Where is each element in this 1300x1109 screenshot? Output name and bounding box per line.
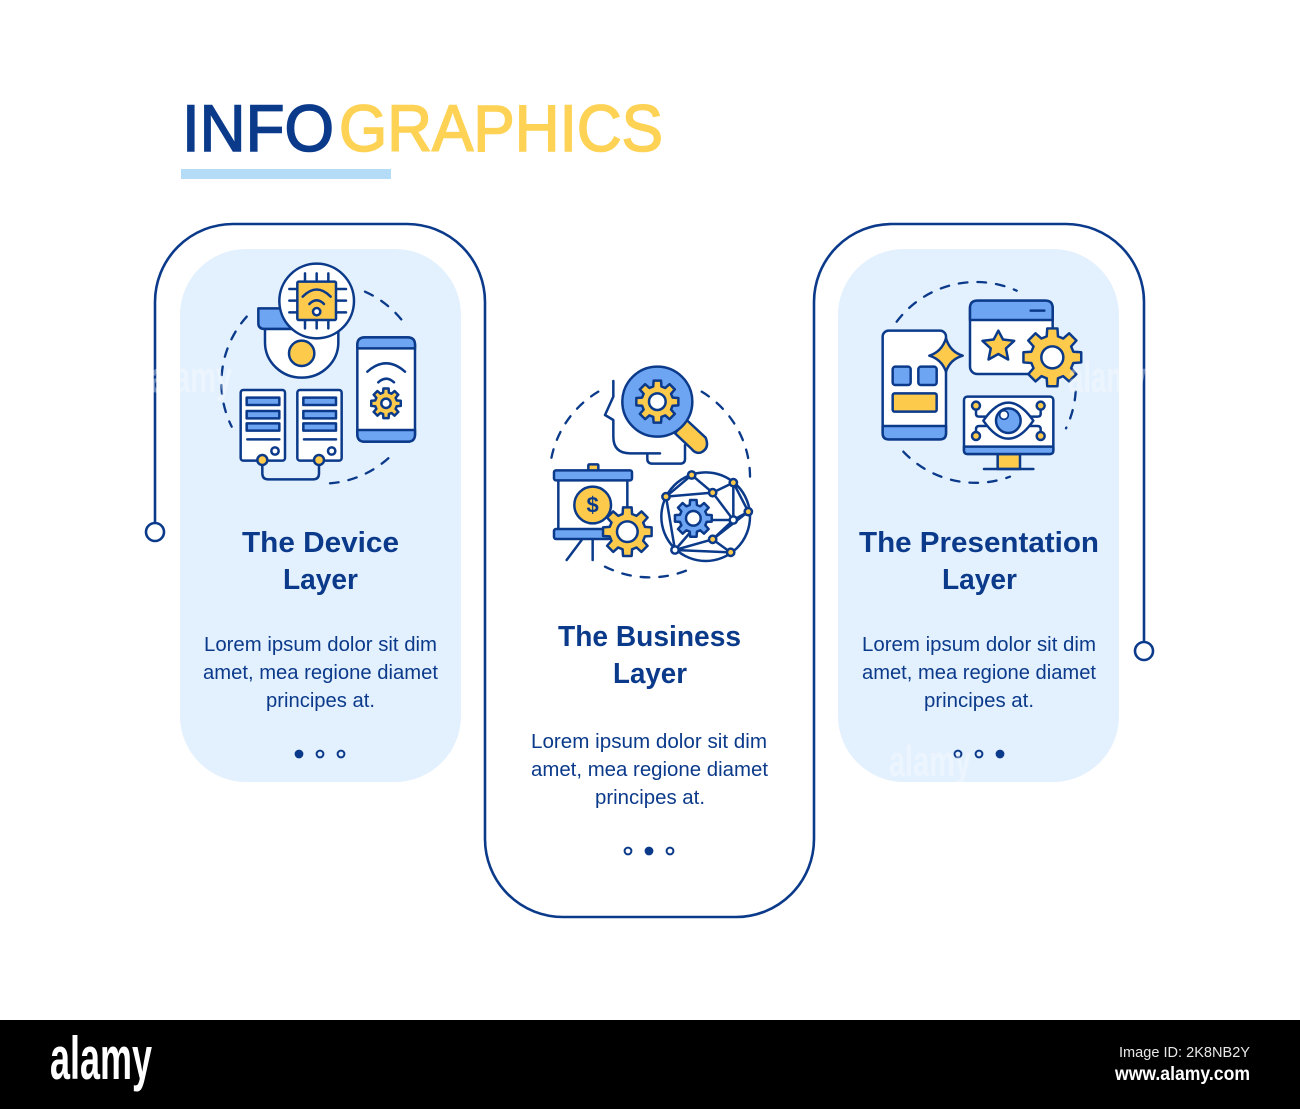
text: device layer description: Lorem ipsum dolor sit dim xyxy=(204,634,437,656)
pagination dots: business layer xyxy=(625,848,673,854)
phone xyxy=(357,337,415,442)
text: business layer description: Lorem ipsum dolor sit dim xyxy=(531,731,767,753)
heading: The Business Layer: Layer xyxy=(613,658,687,690)
heading: The Presentation Layer xyxy=(859,527,1099,596)
presentation board: $ xyxy=(587,493,599,518)
text: business layer description: principes at. xyxy=(595,787,705,809)
icon: device layer xyxy=(221,264,415,483)
mobile screen xyxy=(883,331,963,439)
title: INFOGRAPHICS: INFO xyxy=(182,91,334,165)
watermark traces: alamy xyxy=(889,737,971,786)
heading: The Presentation Layer: Layer xyxy=(942,564,1017,596)
heading: The Business Layer: The Business xyxy=(558,621,741,653)
footer logo: alamy xyxy=(50,1025,152,1092)
servers xyxy=(241,390,342,479)
heading: The Device Layer: Layer xyxy=(283,564,358,596)
footer image id: Image ID: 2K8NB2Y xyxy=(1119,1044,1250,1061)
heading: The Business Layer xyxy=(558,621,741,690)
text: device layer description: amet, mea regione diamet xyxy=(203,662,438,684)
text: presentation layer description: amet, mea regione diamet xyxy=(862,662,1096,684)
title: INFOGRAPHICS: GRAPHICS xyxy=(339,91,663,165)
panel background: presentation layer xyxy=(838,249,1119,782)
text: presentation layer description: Lorem ipsum dolor sit dim xyxy=(862,634,1096,656)
rating window xyxy=(970,301,1081,386)
head with magnifier xyxy=(605,367,707,464)
pagination dots: device layer xyxy=(296,751,344,757)
icon: business layer xyxy=(551,367,752,577)
text: presentation layer description: principes at. xyxy=(924,690,1034,712)
network globe xyxy=(661,471,752,561)
heading: The Presentation Layer: The Presentation xyxy=(859,527,1099,559)
text: business layer description: amet, mea regione diamet xyxy=(531,759,768,781)
panel background: device layer xyxy=(180,249,461,782)
text: business layer description xyxy=(531,731,768,809)
chip with wifi xyxy=(279,264,354,338)
monitor with eye xyxy=(964,397,1053,469)
heading: The Device Layer: The Device xyxy=(242,527,399,559)
footer url: www.alamy.com xyxy=(1114,1064,1250,1085)
pagination dots: presentation layer xyxy=(955,751,1003,757)
text: presentation layer description xyxy=(862,634,1096,712)
presentation board xyxy=(554,464,652,560)
camera xyxy=(258,308,338,378)
heading: The Device Layer xyxy=(242,527,399,596)
connecting outline xyxy=(146,224,1153,917)
text: device layer description xyxy=(203,634,438,712)
icon: presentation layer xyxy=(883,282,1081,483)
title: INFOGRAPHICS xyxy=(182,91,663,165)
title underline xyxy=(181,169,391,179)
watermark traces: alamy xyxy=(1068,353,1146,402)
footer bar xyxy=(0,1020,1300,1109)
text: device layer description: principes at. xyxy=(266,690,375,712)
watermark traces: alamy xyxy=(150,353,232,402)
watermark traces xyxy=(150,353,1146,786)
